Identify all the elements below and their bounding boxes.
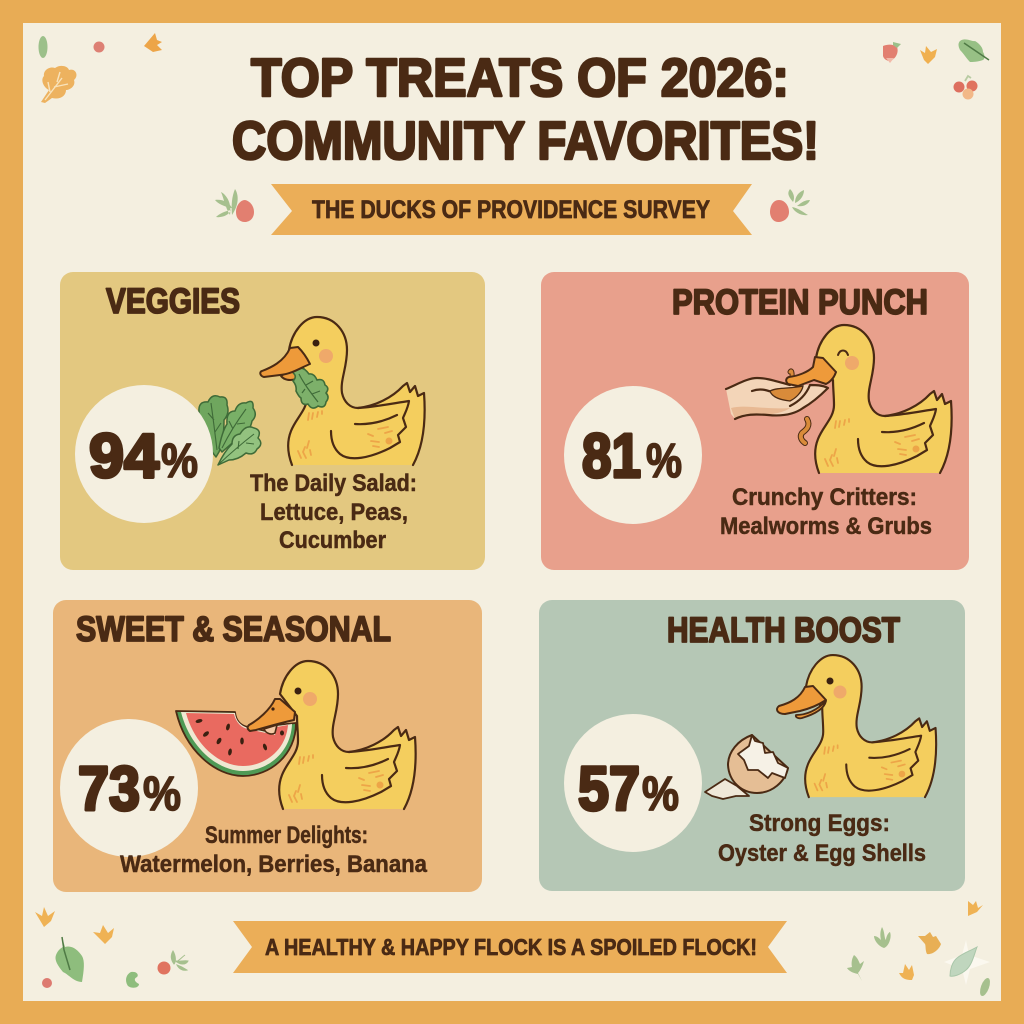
icon: duck with lettuce [260, 317, 425, 465]
panel: veggies [60, 272, 485, 570]
percentage badge: 81%: % [646, 435, 682, 488]
percentage badge: 94% [75, 385, 213, 523]
decorations: bottom right [847, 901, 992, 997]
caption: summer delights: Watermelon, Berries, Banana [120, 851, 428, 878]
heading: protein punch: PROTEIN PUNCH [672, 283, 928, 322]
percentage badge: 57%: 57 [578, 755, 640, 824]
decorations: right of subtitle [770, 189, 810, 222]
panel: health boost [539, 600, 965, 891]
subtitle banner: THE DUCKS OF PROVIDENCE SURVEY [312, 196, 710, 224]
panel: protein punch [541, 272, 969, 570]
icon: falling mealworm [801, 419, 808, 443]
icon: duck with watermelon [176, 661, 416, 809]
percentage badge: 73% [60, 719, 198, 857]
caption: strong eggs: Strong Eggs: [749, 810, 890, 837]
panel: sweet and seasonal [53, 600, 482, 892]
subtitle banner [271, 184, 752, 235]
title: COMMUNITY FAVORITES! [232, 111, 819, 171]
caption: summer delights: Summer Delights: [205, 822, 368, 849]
caption: strong eggs [718, 810, 926, 867]
percentage badge: 94%: % [161, 435, 198, 488]
footer banner [233, 921, 787, 973]
footer banner: A HEALTHY & HAPPY FLOCK IS A SPOILED FLOCK! [265, 934, 757, 960]
icon: lettuce bunch [198, 396, 261, 465]
percentage badge: 81%: 81 [582, 422, 641, 491]
caption: the daily salad: Lettuce, Peas, [260, 499, 408, 526]
percentage badge: 81% [564, 386, 702, 524]
percentage badge: 57%: % [642, 768, 679, 821]
title [232, 48, 819, 171]
caption: strong eggs: Oyster & Egg Shells [718, 840, 926, 867]
percentage badge: 57% [564, 714, 702, 852]
decorations: left of subtitle [215, 189, 254, 222]
caption: summer delights [120, 822, 428, 878]
heading: veggies: VEGGIES [106, 282, 240, 321]
percentage badge: 73%: % [143, 768, 181, 821]
caption: the daily salad: The Daily Salad: [250, 470, 417, 497]
percentage badge: 94%: 94 [89, 422, 160, 491]
caption: the daily salad [250, 470, 417, 554]
caption: crunchy critters [720, 484, 932, 540]
decorations: bottom left [35, 907, 188, 988]
percentage badge: 73%: 73 [78, 755, 140, 824]
decorations: top right [883, 39, 989, 100]
icon: duck with mealworms [726, 325, 952, 473]
caption: crunchy critters: Mealworms & Grubs [720, 513, 932, 540]
caption: crunchy critters: Crunchy Critters: [732, 484, 917, 511]
icon: eggshell [705, 735, 788, 799]
heading: sweet and seasonal: SWEET & SEASONAL [76, 610, 391, 649]
title: TOP TREATS OF 2026: [251, 48, 789, 108]
caption: the daily salad: Cucumber [279, 527, 386, 554]
decorations: top left [38, 33, 162, 103]
heading: health boost: HEALTH BOOST [667, 611, 900, 650]
icon: duck [777, 655, 936, 797]
